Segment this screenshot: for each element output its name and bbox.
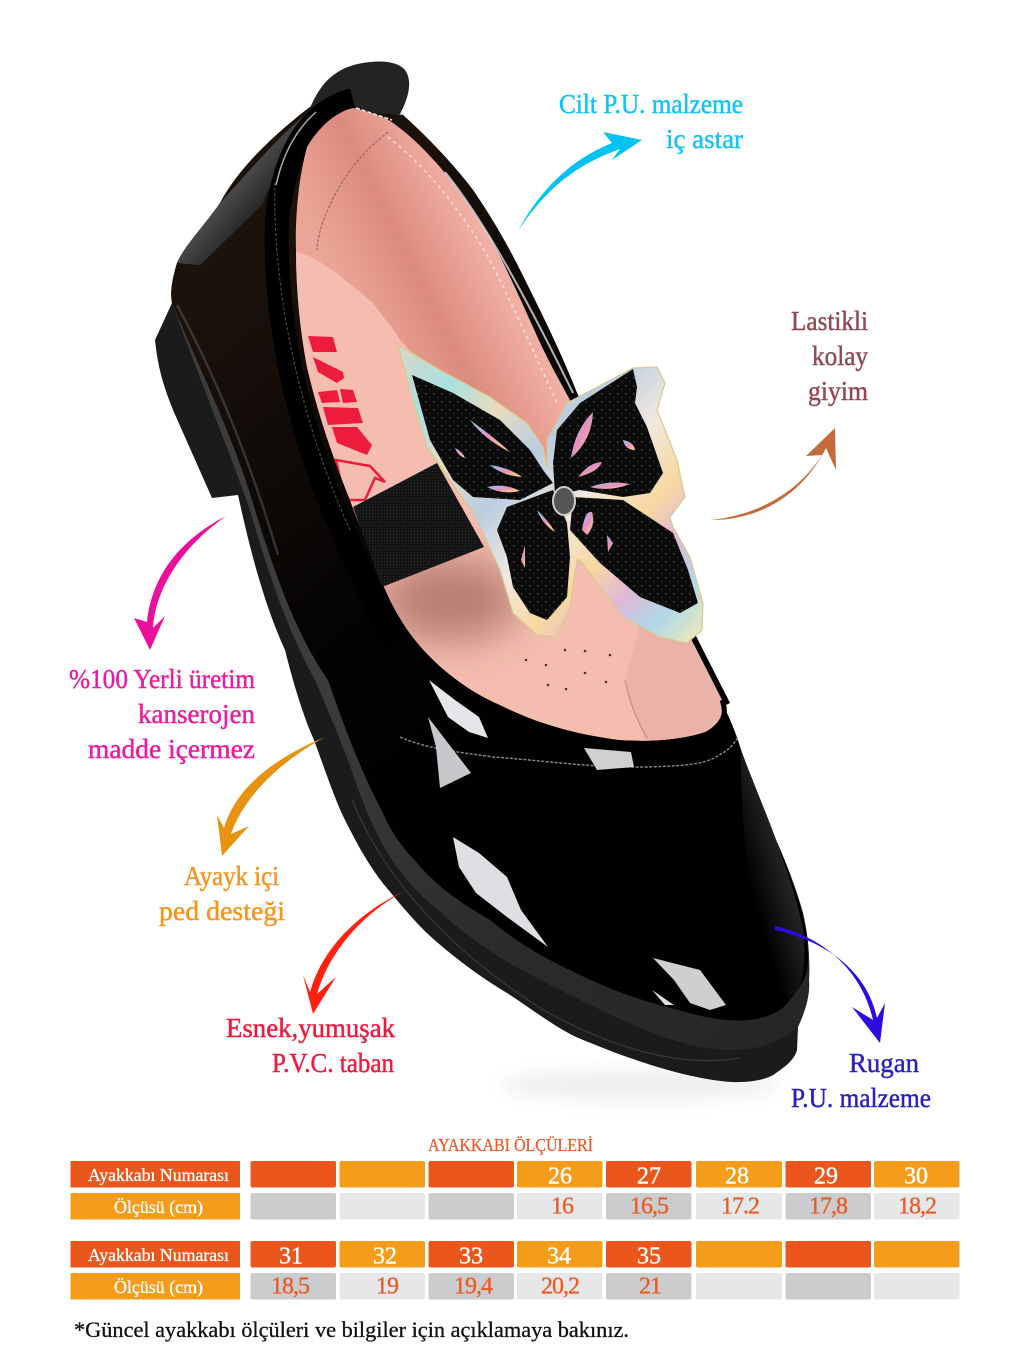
rim highlight	[445, 172, 573, 393]
label: elastic easy wear: giyim	[808, 376, 868, 406]
photo: black patent leather shoe	[155, 62, 809, 1101]
label: insole pad: Ayayk içi	[184, 861, 279, 891]
label: flexible sole	[226, 1013, 395, 1078]
elastic strap	[353, 463, 484, 587]
holographic backing	[398, 345, 703, 643]
table 2 measure row: 20,2	[541, 1274, 579, 1300]
heel highlight	[177, 115, 305, 265]
table 1 measure row	[70, 1193, 960, 1220]
label: domestic production: madde içermez	[88, 734, 255, 764]
ground shadow	[500, 1069, 780, 1101]
label: lining material: iç astar	[666, 124, 743, 154]
table 2 measure row: Ölçüsü (cm)	[114, 1277, 203, 1298]
black rim around opening	[277, 100, 395, 640]
table 1 measure row: 16,5	[630, 1194, 669, 1220]
right rim	[570, 398, 726, 705]
arrow: domestic production callout	[134, 516, 226, 650]
forefoot crease	[625, 680, 647, 738]
wing cut-outs	[455, 412, 635, 568]
label: domestic production: kanserojen	[138, 699, 255, 729]
label: elastic easy wear	[791, 306, 868, 406]
table 1 number row	[70, 1161, 960, 1190]
sole welt band	[171, 107, 809, 1050]
table 2 number row: 33	[459, 1244, 483, 1270]
gloss highlights	[428, 680, 726, 1010]
glitter wings	[412, 375, 553, 500]
label: domestic production: %100 Yerli üretim	[69, 664, 255, 694]
table 1 measure row: 18,2	[898, 1194, 936, 1220]
heel pad seam	[317, 132, 388, 250]
heel side sheen	[177, 305, 278, 555]
label: patent material	[791, 1048, 931, 1113]
label: flexible sole: P.V.C. taban	[272, 1048, 394, 1078]
rim stitch	[356, 108, 392, 120]
arrow: patent material callout	[775, 926, 885, 1043]
butterfly ornament	[398, 345, 703, 643]
label: flexible sole: Esnek,yumuşak	[226, 1013, 395, 1043]
side stitch seam	[275, 183, 350, 530]
size chart	[70, 1135, 960, 1300]
toe seam	[400, 737, 738, 767]
chart title: AYAKKABI ÖLÇÜLERİ	[428, 1135, 593, 1155]
label: elastic easy wear: Lastikli	[791, 306, 868, 336]
footnote: *Güncel ayakkabı ölçüleri ve bilgiler için açıklamaya bakınız.	[74, 1317, 629, 1342]
table 2 measure row	[70, 1273, 960, 1300]
forefoot wall	[625, 627, 722, 741]
table 1 number row: 29	[814, 1164, 838, 1190]
table 2 number row: 31	[279, 1244, 303, 1270]
table 2 number row: 35	[637, 1244, 661, 1270]
insole	[280, 252, 730, 750]
table 1 number row: 28	[725, 1164, 749, 1190]
label: patent material: Rugan	[849, 1048, 919, 1078]
table 2 number row: 32	[373, 1244, 397, 1270]
label: domestic production	[69, 664, 255, 764]
label: insole pad: ped desteği	[159, 896, 285, 926]
insole logo	[308, 336, 385, 500]
table 1 number row: 26	[548, 1164, 572, 1190]
label: insole pad	[159, 861, 285, 926]
heel tab	[308, 62, 409, 120]
table 1 number row: Ayakkabı Numarası	[88, 1165, 229, 1185]
patent upper	[171, 107, 808, 1021]
arrow: insole pad callout	[217, 737, 325, 856]
table 1 measure row: Ölçüsü (cm)	[114, 1197, 203, 1218]
forefoot shadow	[380, 558, 520, 642]
label: lining material: Cilt P.U. malzeme	[559, 89, 743, 119]
table 1 number row: 30	[904, 1164, 928, 1190]
arrow: lining callout	[518, 132, 642, 231]
label: lining material	[559, 89, 743, 154]
table 2 measure row: 19	[376, 1274, 399, 1300]
table 1 measure row: 17.2	[721, 1194, 759, 1220]
table 1 measure row: 16	[551, 1194, 574, 1220]
table 1 number row: 27	[637, 1164, 661, 1190]
table 2 number row: Ayakkabı Numarası	[88, 1245, 229, 1265]
label: patent material: P.U. malzeme	[791, 1083, 931, 1113]
table 2 measure row: 21	[639, 1274, 661, 1300]
rim top highlight	[276, 112, 316, 185]
table 2 number row: 34	[547, 1244, 571, 1270]
lining interior shapes	[280, 132, 730, 750]
pink lining	[296, 108, 723, 741]
toe rim	[495, 700, 724, 745]
sole and outer silhouette	[155, 107, 809, 1082]
insole perforations	[525, 649, 611, 690]
label: elastic easy wear: kolay	[812, 341, 868, 371]
toe side glare	[741, 750, 804, 1000]
arrow: elastic callout	[711, 428, 836, 520]
table 1 measure row: 17,8	[809, 1194, 848, 1220]
arrow: sole callout	[303, 891, 404, 1014]
table 2 measure row: 19,4	[454, 1274, 493, 1300]
table 2 measure row: 18,5	[271, 1274, 310, 1300]
table 2 number row	[70, 1241, 960, 1270]
wall stitching	[388, 137, 558, 405]
sole edge line	[352, 800, 740, 1061]
centre rivet	[553, 487, 575, 515]
